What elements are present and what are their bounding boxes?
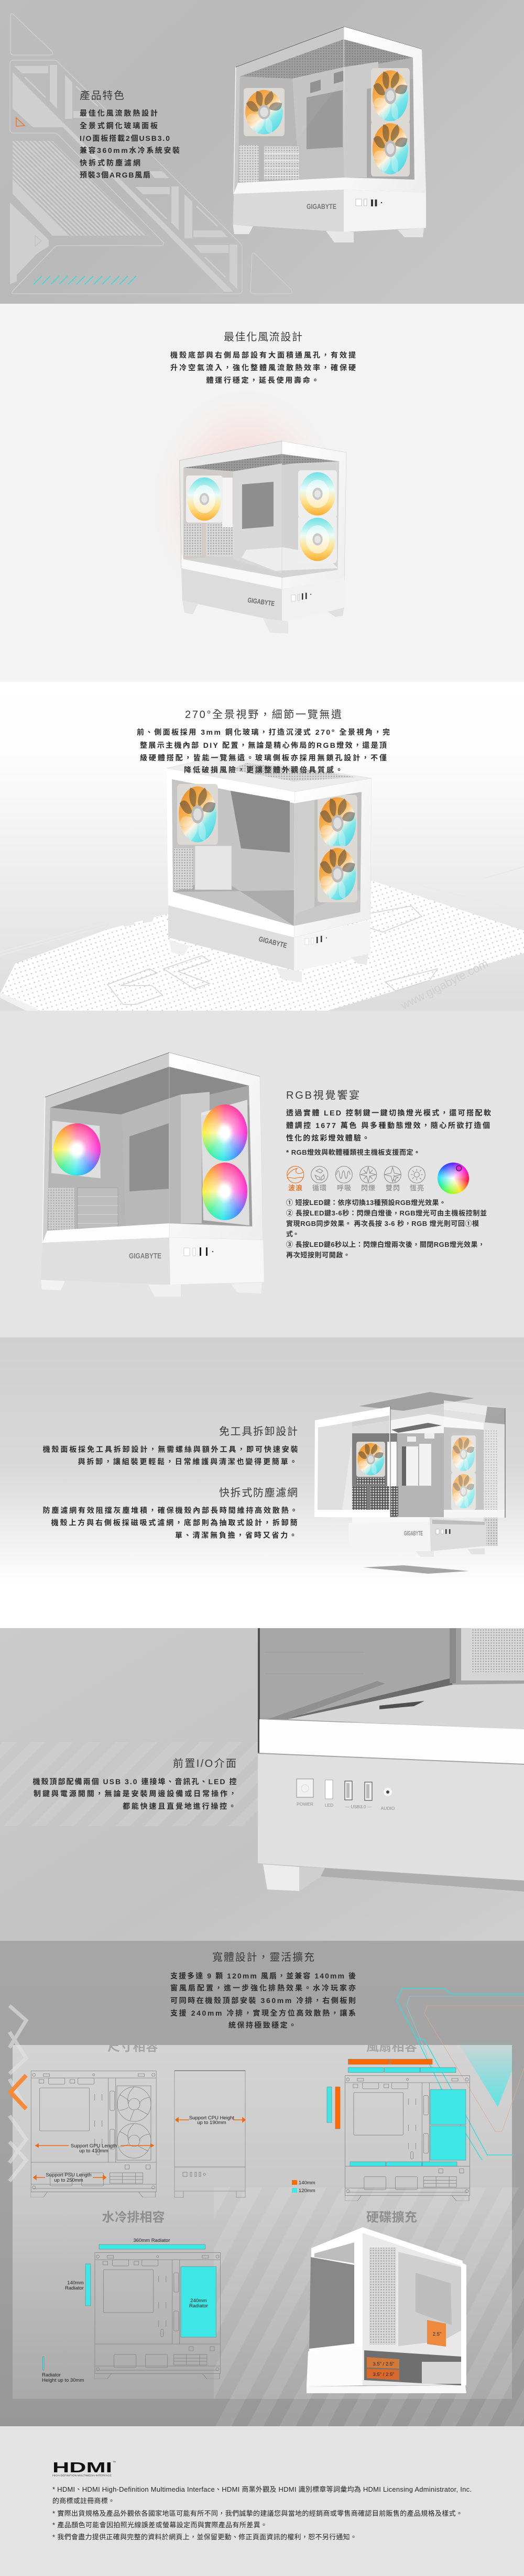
dotted platform floor: www.gigabyte.com [398, 957, 490, 1012]
icon: breathing [335, 1166, 352, 1183]
HDMI logo: HIGH-DEFINITION MULTIMEDIA INTERFACE [52, 2474, 112, 2477]
feature list: 預裝3個ARGB風扇 [80, 171, 150, 179]
product image: case glass corner view: GIGABYTE [258, 935, 288, 949]
panel: product features [0, 0, 524, 304]
tool-free description: 機殼面板採免工具拆卸設計，無需螺絲與額外工具，即可快速安裝 [43, 1445, 298, 1454]
diagonal stripes [214, 2187, 524, 2426]
panoramic description: 前、側面板採用 3mm 鋼化玻璃，打造沉浸式 270° 全景視角，完 [137, 728, 390, 736]
I/O description [32, 1777, 237, 1810]
lighting mode icons [287, 1166, 425, 1192]
RGB description: 體調控 1677 萬色 與多種動態燈效，隨心所欲打造個 [286, 1121, 490, 1130]
airflow description: 機殼底部與右側局部設有大面積通風孔，有效提 [170, 351, 356, 359]
LED key instructions: ① 短按LED鍵：依序切換13種預設RGB燈光效果。 [286, 1199, 446, 1207]
feature list: 全景式鋼化玻璃面板 [80, 121, 158, 130]
footnotes: * 實際出貨規格及產品外觀依各國家地區可能有所不同，我們誠摯的建議您與當地的經銷商或零售商確認目前販售的產品規格及樣式。 [52, 2509, 463, 2517]
panoramic description: 整展示主機內部 DIY 配置，無論是精心佈局的RGB燈效，還是頂 [140, 741, 387, 749]
diagram: size compatibility: Support GPU Length [71, 2143, 117, 2149]
LED key instructions: 實現RGB同步效果。 再次長按 3-6 秒，RGB 燈光則可回①模 [286, 1220, 479, 1228]
compatibility description [170, 1972, 356, 2029]
legend: fan sizes [292, 2180, 315, 2194]
RGB description [286, 1109, 491, 1156]
panoramic description: 級硬體搭配，皆能一覽無遺。玻璃側板亦採用無鎖孔設計，不僅 [140, 754, 387, 762]
decoration: left chevrons [9, 2006, 26, 2181]
diagram: size compatibility: up to 410mm [79, 2148, 108, 2154]
product image: drive bays: 2.5" [433, 2331, 441, 2337]
RGB description: 性化的炫彩燈效體驗。 [286, 1134, 369, 1142]
tool-free description [43, 1445, 298, 1466]
heading: 產品特色: 產品特色 [80, 90, 124, 102]
diagram: front view CPU height [174, 2071, 245, 2197]
icon: wave [287, 1166, 304, 1183]
diagram: radiator compatibility: Radiator [189, 2303, 208, 2309]
inner light panel [13, 2045, 512, 2399]
removable right glass panel [444, 1400, 505, 1518]
product image: drive bays: 3.5" / 2.5" [373, 2361, 395, 2367]
heading: 寬體設計: 寬體設計，靈活擴充 [212, 1951, 314, 1963]
product image: white PC case: GIGABYTE [307, 202, 336, 211]
diagram: radiator compatibility: 240mm [190, 2298, 207, 2304]
compatibility description: 支援多達 9 顆 120mm 風扇，並兼容 140mm 後 [170, 1972, 356, 1980]
diagram: radiator compatibility: 360mm Radiator [133, 2238, 170, 2243]
feature list: 最佳化風流散熱設計 [80, 109, 158, 117]
footnotes: * 產品顏色可能會因拍照光線誤差或螢幕設定而與實際產品有所差異。 [52, 2521, 267, 2529]
LED key instructions: ③ 長按LED鍵6秒以上：閃爍白燈兩次後，關閉RGB燈光效果， [286, 1241, 485, 1248]
heading: 風扇相容: 風扇相容 [366, 2040, 417, 2054]
lighting mode icons: 呼吸 [337, 1184, 351, 1192]
diagram: size compatibility: up to 250mm [54, 2177, 83, 2183]
HDMI logo: HDMI [52, 2459, 112, 2475]
heading: 尺寸相容: 尺寸相容 [107, 2040, 158, 2054]
panel: tool-free removal and dust filter [0, 1337, 524, 1628]
lighting mode icons: 閃爍 [361, 1184, 375, 1192]
product image: case front-side view [179, 441, 346, 634]
airflow description [170, 351, 356, 384]
lighting mode icons: 循環 [312, 1184, 326, 1192]
dust filter description: 機殼上方與右側板採磁吸式濾網，底部則為抽取式設計，拆卸簡 [51, 1519, 298, 1527]
feature list: I/O面板搭載2個USB3.0 [80, 134, 170, 142]
heading: 快拆式防塵濾網: 快拆式防塵濾網 [219, 1487, 298, 1499]
panel: legal notes [0, 2426, 524, 2576]
diagonal stripes [0, 1742, 258, 1826]
footnotes: * 我們會盡力提供正確與完整的資料於網頁上，並保留更動、修正頁面資訊的權利，恕不另行通知。 [52, 2533, 357, 2541]
lighting mode icons: 恆亮 [410, 1184, 424, 1192]
RGB fan top right [202, 1104, 247, 1161]
heading: 270° panoramic: 270°全景視野，細節一覽無遺 [185, 709, 342, 721]
diagram: radiator compatibility: 140mm [67, 2280, 84, 2286]
HDMI logo: TM [113, 2460, 116, 2463]
I/O description: 都能快速且直覺地進行操控。 [123, 1802, 236, 1810]
dust filter description: 防塵濾網有效阻擋灰塵堆積，確保機殼內部長時間維持高效散熱。 [43, 1506, 298, 1514]
panel: 270 degree panoramic view [0, 682, 524, 1012]
LED key instructions: 式。 [286, 1230, 299, 1238]
I/O ports: — USB3.0 — [345, 1804, 372, 1809]
legend: fan sizes: 120mm [299, 2188, 315, 2194]
dotted platform floor [0, 867, 524, 1012]
product image: case glass corner view [167, 756, 372, 982]
dust filter description: 單、清潔無負擔，省時又省力。 [175, 1531, 297, 1539]
diagram: fan compatibility [327, 2059, 470, 2201]
diagram: radiator compatibility: Radiator [65, 2285, 84, 2291]
product image: case front-side view: GIGABYTE [247, 596, 275, 607]
heading: 最佳化風流設計: 最佳化風流設計 [224, 331, 302, 343]
heading: 免工具拆卸設計: 免工具拆卸設計 [219, 1425, 298, 1438]
RGB description: 透過實體 LED 控制鍵一鍵切換燈光模式，還可搭配軟 [286, 1109, 491, 1117]
LED key instructions: 再次短按則可開啟。 [286, 1251, 350, 1259]
icon: cycle [311, 1166, 328, 1183]
case base [352, 1517, 430, 1523]
decoration: cyan outline [397, 1988, 524, 2160]
removable left glass panel [318, 1422, 352, 1510]
diagram: front view CPU height: up to 190mm [197, 2120, 226, 2126]
feature list: 兼容360mm水冷系統安裝 [80, 146, 180, 154]
legend: fan sizes: 140mm [299, 2180, 315, 2186]
product image: drive bays: 3.5" / 2.5" [373, 2372, 395, 2378]
background red glow [147, 382, 346, 623]
compatibility description: 統保持極致穩定。 [228, 2021, 296, 2029]
icon: double flash [384, 1166, 401, 1183]
heading: 水冷排相容: 水冷排相容 [102, 2210, 165, 2225]
diagram: front view CPU height: Support CPU Height [189, 2115, 234, 2121]
footnotes [52, 2485, 472, 2541]
dust filter description [43, 1506, 298, 1539]
LED key instructions: ② 長按LED鍵3-6秒：閃爍白燈後，RGB燈光可由主機板控制並 [286, 1209, 487, 1217]
RGB fan left [53, 1123, 101, 1176]
I/O ports [297, 1779, 395, 1811]
heading: 硬碟擴充: 硬碟擴充 [366, 2210, 417, 2225]
I/O ports: POWER [297, 1801, 313, 1807]
product image: white PC case [233, 27, 426, 242]
panoramic description: 降低破損風險，更讓整體外觀倍具質感。 [184, 766, 343, 774]
exploded product image [314, 1392, 505, 1574]
LED key instructions [286, 1199, 487, 1259]
I/O ports: AUDIO [381, 1806, 395, 1811]
I/O ports: LED [325, 1803, 333, 1808]
icon: flash [360, 1166, 377, 1183]
diagram: radiator compatibility: Radiator [42, 2372, 61, 2378]
feature list [80, 109, 180, 179]
panel: RGB lighting [0, 1011, 524, 1337]
airflow description: 體運行穩定，延長使用壽命。 [206, 376, 319, 384]
product image: case with RGB fans: GIGABYTE [129, 1252, 161, 1261]
panel: compatibility [0, 1941, 524, 2426]
panel: airflow design [0, 304, 524, 682]
lighting mode icons: 波浪 [288, 1184, 302, 1192]
RGB fan bottom right [202, 1163, 247, 1220]
panoramic description [137, 728, 390, 774]
product image: drive bays [307, 2227, 466, 2393]
compatibility description: 可同時在機殼頂部安裝 360mm 冷排，右側板則 [170, 1996, 356, 2005]
lighting mode icons: 雙閃 [386, 1184, 400, 1192]
panel: front I/O [0, 1628, 524, 1941]
close-up product image [258, 1628, 524, 1892]
decorative tech background graphic [10, 14, 292, 294]
color wheel [438, 1163, 469, 1194]
icon: steady [408, 1166, 425, 1183]
heading: RGB視覺饗宴: RGB視覺饗宴 [286, 1089, 359, 1101]
feature list: 快拆式防塵濾網 [80, 159, 140, 167]
compatibility description: 支援 240mm 冷排，實現全方位高效散熱，讓系 [170, 2009, 356, 2017]
heading: 前置I/O介面: 前置I/O介面 [173, 1757, 236, 1770]
footnotes: * HDMI、HDMI High-Definition Multimedia Interface、HDMI 商業外觀及 HDMI 識別標章等詞彙均為 HDMI Licensing Administrator, Inc. [52, 2485, 472, 2493]
tool-free description: 與拆卸，讓組裝更輕鬆，日常維護與清潔也變得更簡單。 [78, 1457, 297, 1466]
I/O description: 機殼頂部配備兩個 USB 3.0 連接埠、音訊孔、LED 控 [32, 1777, 237, 1786]
diagram: size compatibility: Support PSU Length [46, 2172, 92, 2178]
product image: case with RGB fans [41, 1053, 264, 1297]
compatibility description: 窗風扇配置，進一步強化排熱效果。水冷玩家亦 [170, 1984, 356, 1992]
diagram: radiator compatibility [42, 2238, 220, 2383]
exploded product image: GIGABYTE [404, 1531, 423, 1537]
footnotes: 的商標或註冊商標。 [52, 2497, 115, 2505]
airflow description: 升冷空氣流入，強化整體風流散熱效率，確保硬 [170, 363, 356, 372]
HDMI logo [52, 2459, 116, 2477]
diagram: size compatibility [31, 2071, 156, 2197]
diagram: radiator compatibility: Height up to 30mm [42, 2378, 84, 2383]
I/O description: 制鍵與電源開關，無論是安裝周邊設備或日常操作， [34, 1789, 236, 1798]
RGB description: * RGB燈效與軟體種類視主機板支援而定。 [286, 1148, 420, 1156]
